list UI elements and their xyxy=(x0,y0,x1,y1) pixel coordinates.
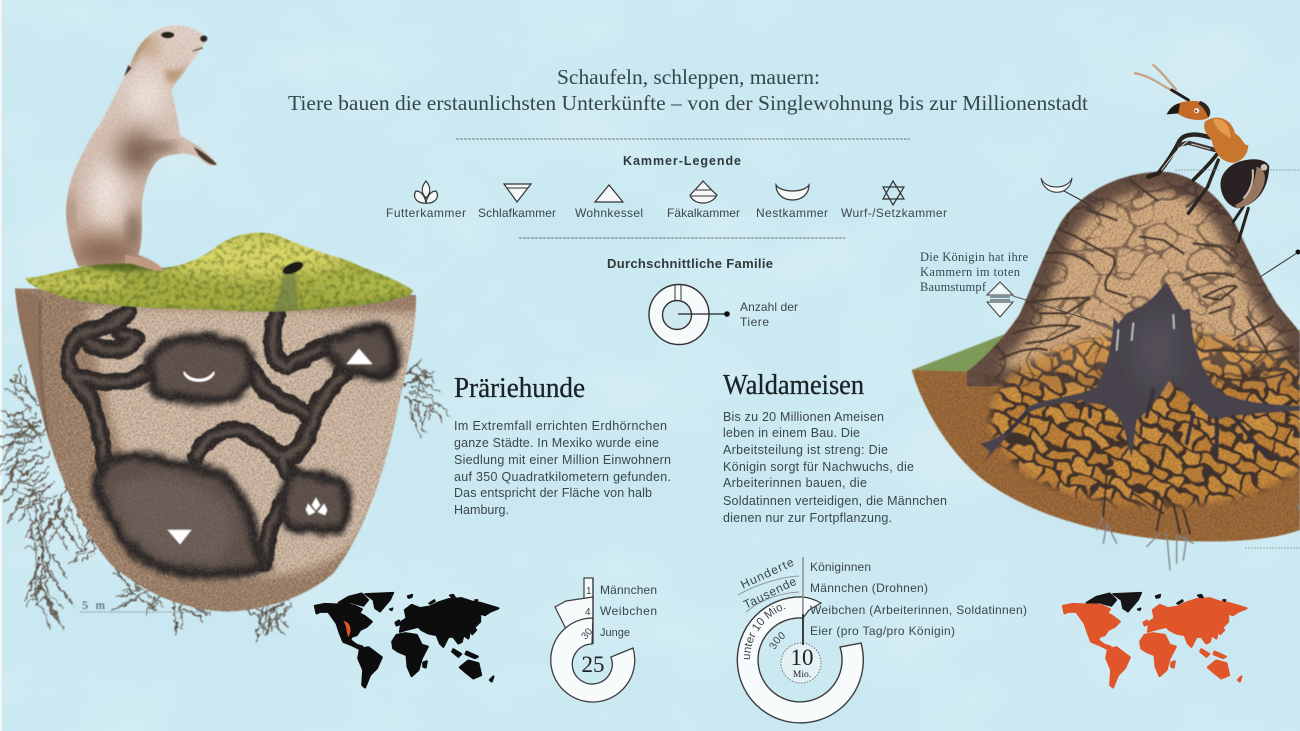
heading: Präriehunde xyxy=(454,372,585,404)
family ring key xyxy=(649,284,730,344)
callout: queen chambers xyxy=(920,250,1028,294)
series labels: Eier (pro Tag/pro Königin) xyxy=(810,624,955,638)
legend: Nestkammer xyxy=(756,185,828,220)
tunnels and chambers xyxy=(68,312,395,573)
panel: Waldameisen text xyxy=(723,369,947,525)
family ring caption xyxy=(740,300,798,329)
legend: Wurf-/Setzkammer xyxy=(841,181,947,220)
segment labels: Weibchen xyxy=(600,604,657,618)
body text: Hamburg. xyxy=(454,503,509,517)
body text: Arbeiterinnen bauen, die xyxy=(723,476,867,490)
segment labels: Junge xyxy=(600,627,630,639)
legend: Nestkammer: Nestkammer xyxy=(756,206,828,220)
soil block xyxy=(14,288,417,612)
abdomen xyxy=(1221,159,1269,208)
segment labels xyxy=(600,583,657,639)
symbol: living chamber xyxy=(347,349,372,364)
icon: nest chamber callout xyxy=(1041,178,1090,205)
legend: Fäkalkammer xyxy=(667,181,740,220)
soil below ground xyxy=(911,369,1300,542)
family ring caption: Anzahl der xyxy=(740,300,798,314)
inner circle: 10 Mio. xyxy=(781,643,821,683)
legend: Schlafkammer xyxy=(478,184,556,220)
legend: Wurf-/Setzkammer: Wurf-/Setzkammer xyxy=(841,206,947,220)
family heading: Durchschnittliche Familie xyxy=(607,256,773,271)
head xyxy=(1167,101,1211,120)
series labels xyxy=(810,560,1027,638)
title: Schaufeln, schleppen, mauern: xyxy=(557,65,820,89)
body text xyxy=(723,410,947,525)
callout: queen chambers: Baumstumpf xyxy=(920,280,987,294)
body text: Arbeitsteilung ist streng: Die xyxy=(723,443,888,457)
body text: Soldatinnen verteidigen, die Männchen xyxy=(723,494,947,508)
symbol: nest chamber xyxy=(184,372,214,381)
left grass wedge xyxy=(912,328,1300,375)
legend: Schlafkammer: Schlafkammer xyxy=(478,206,556,220)
rotated labels xyxy=(738,555,799,612)
rotated labels: Tausende xyxy=(741,574,799,612)
illustration: wood ant xyxy=(1135,65,1269,242)
title: Tiere bauen die erstaunlichsten Unterkünfte – von der Singlewohnung bis zur Millionenstadt xyxy=(288,91,1088,115)
segment values: 4 xyxy=(585,607,591,618)
series labels: Königinnen xyxy=(810,560,871,574)
pointer with dot xyxy=(1260,250,1300,277)
curved labels: 300 xyxy=(769,632,785,649)
legend: average family xyxy=(607,256,798,344)
family ring caption: Tiere xyxy=(740,315,769,329)
symbol: food chamber xyxy=(306,498,327,515)
icon: queen chamber diamond xyxy=(987,282,1110,326)
symbol: sleeping chamber xyxy=(168,530,191,544)
segment labels: Männchen xyxy=(600,583,657,597)
map: prairie dog range xyxy=(315,593,498,687)
body text: Siedlung mit einer Million Einwohnern xyxy=(454,453,671,467)
panel: Präriehunde text xyxy=(454,372,671,517)
legend: Futterkammer xyxy=(386,181,466,220)
body text: dienen nur zur Fortpflanzung. xyxy=(723,511,892,525)
callout: queen chambers: Die Königin hat ihre xyxy=(920,250,1028,264)
ring: Weibchen xyxy=(737,597,863,723)
arcs xyxy=(738,576,799,612)
annotations at the anthill xyxy=(920,170,1300,548)
total: 10 Mio.: Mio. xyxy=(793,670,811,680)
segment values: 30 xyxy=(579,626,595,642)
series labels: Männchen (Drohnen) xyxy=(810,581,928,595)
chart: prairie dog family xyxy=(551,578,657,702)
segment: Junge xyxy=(551,618,635,702)
body text: ganze Städte. In Mexiko wurde eine xyxy=(454,436,659,450)
ant tunnel network xyxy=(986,173,1300,388)
map: wood ant range xyxy=(1063,593,1246,687)
legend: Wohnkessel xyxy=(575,185,643,220)
illustration: prairie dog xyxy=(65,25,218,272)
segment values xyxy=(579,586,595,642)
segment values: 1 xyxy=(586,586,592,597)
illustration: prairie dog burrow xyxy=(0,225,449,640)
fine roots under the hill xyxy=(1097,503,1300,570)
legend: Fäkalkammer: Fäkalkammer xyxy=(667,206,740,220)
title xyxy=(288,65,1088,115)
axis line xyxy=(802,557,804,645)
body text: auf 350 Quadratkilometern gefunden. xyxy=(454,470,671,484)
body text: Das entspricht der Fläche von halb xyxy=(454,486,652,500)
burrow entrance hole xyxy=(281,259,305,277)
body text: Im Extremfall errichten Erdhörnchen xyxy=(454,419,667,433)
chart: wood ant colony xyxy=(736,555,1027,724)
rotated labels: Hunderte xyxy=(738,555,796,592)
ring tip xyxy=(803,597,821,618)
total: 25: 25 xyxy=(582,652,604,677)
legs xyxy=(1148,135,1248,242)
antennae xyxy=(1135,65,1188,100)
illustration: anthill xyxy=(905,165,1300,570)
series labels: Weibchen (Arbeiterinnen, Soldatinnen) xyxy=(810,603,1027,617)
body text: leben in einem Bau. Die xyxy=(723,426,860,440)
legend heading: Kammer-Legende xyxy=(623,154,741,168)
callout: queen chambers: Kammern im toten xyxy=(920,265,1021,279)
legend: chamber types xyxy=(386,154,947,220)
body text: Bis zu 20 Millionen Ameisen xyxy=(723,410,884,424)
total: 10 Mio.: 10 xyxy=(790,645,814,670)
roots around the burrow xyxy=(0,359,449,640)
curved labels: unter 10 Mio. xyxy=(744,605,786,660)
legend: Futterkammer: Futterkammer xyxy=(386,206,466,220)
heading: Waldameisen xyxy=(723,369,864,401)
mound xyxy=(960,165,1300,390)
grass top xyxy=(24,232,414,312)
segment: Weibchen xyxy=(555,597,593,629)
body text: Königin sorgt für Nachwuchs, die xyxy=(723,460,914,474)
scale: 5 m xyxy=(80,598,212,612)
scale: 5 m: 5 m xyxy=(82,598,106,612)
hand-drawn galleries xyxy=(1000,180,1293,380)
body text xyxy=(454,419,671,517)
segment: Männchen xyxy=(584,578,593,600)
legend: Wohnkessel: Wohnkessel xyxy=(575,206,643,220)
thorax xyxy=(1204,118,1248,163)
chamber symbols in burrow xyxy=(168,349,372,544)
tree stump xyxy=(980,282,1300,463)
